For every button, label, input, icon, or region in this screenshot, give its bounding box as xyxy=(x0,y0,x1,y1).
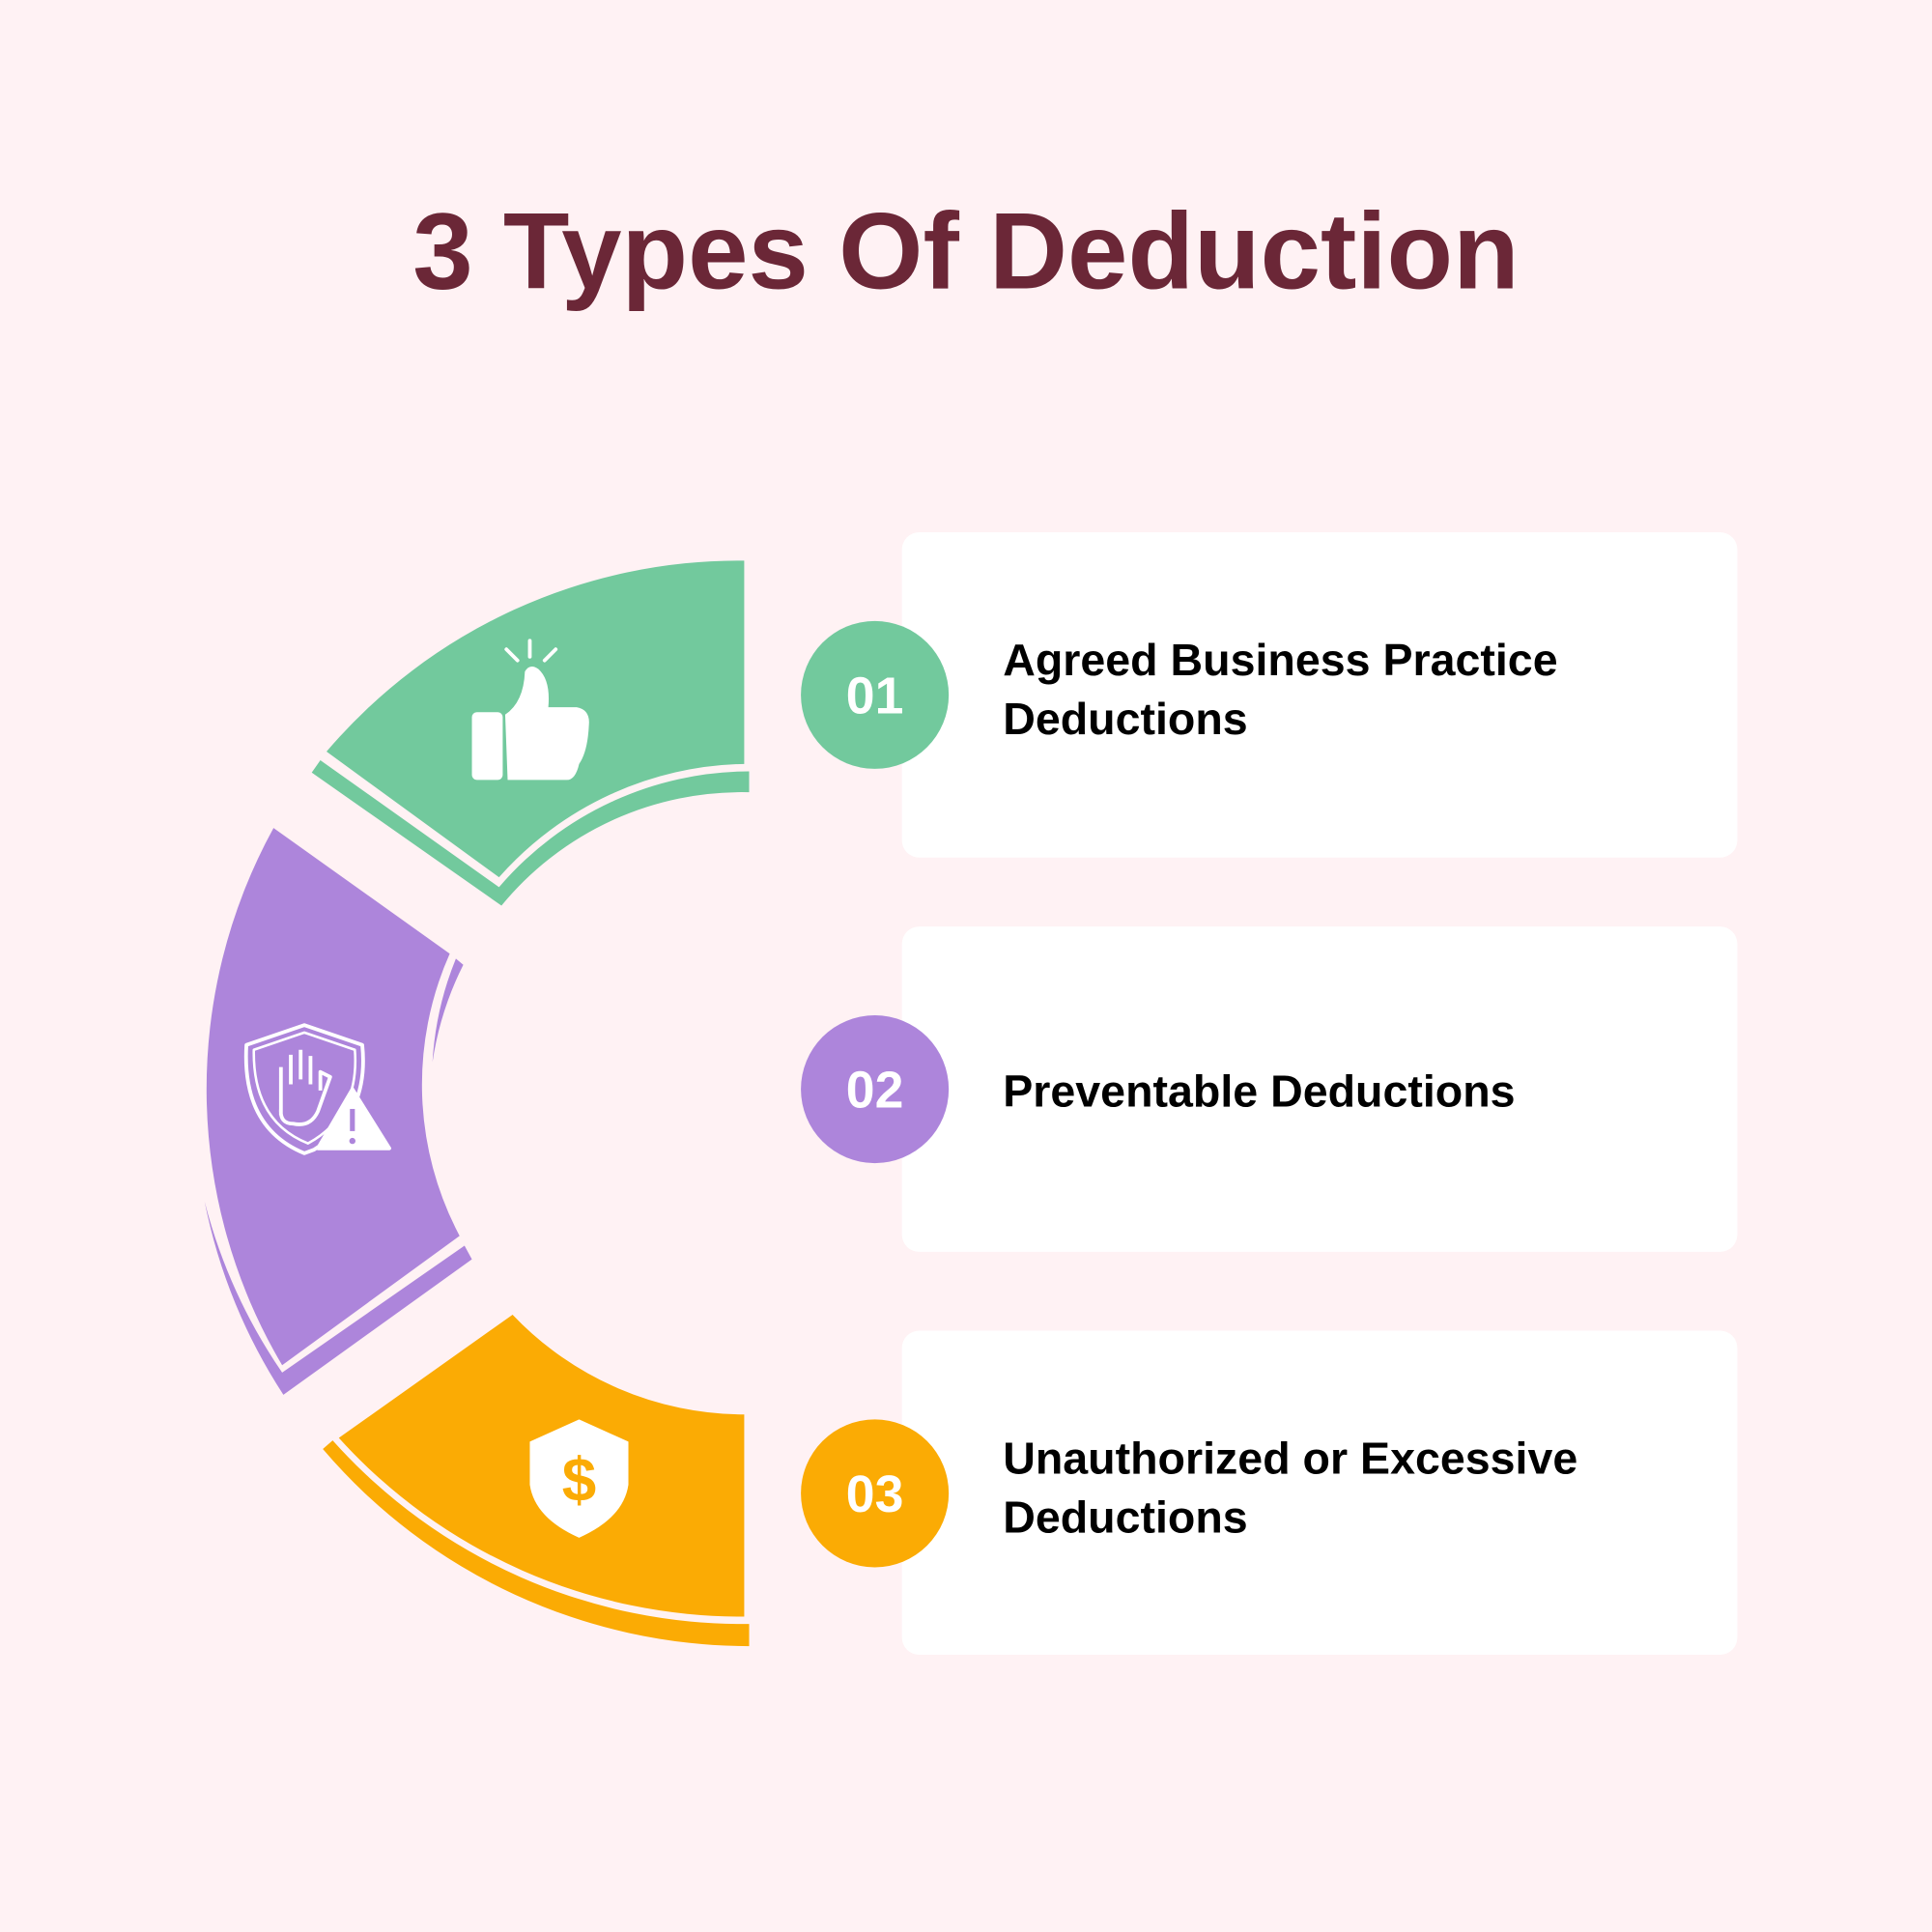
number badge 01 xyxy=(801,621,949,769)
card 3 text: Unauthorized or Excessive xyxy=(1003,1434,1577,1484)
icon: shield with dollar xyxy=(529,1419,629,1538)
card 2 text: Preventable Deductions xyxy=(1003,1065,1516,1116)
number badge 01: 01 xyxy=(846,668,903,725)
card 3 text: Deductions xyxy=(1003,1492,1248,1543)
number badge 03 xyxy=(801,1419,949,1567)
number badge 02 xyxy=(801,1015,949,1163)
card 1 text: Agreed Business Practice xyxy=(1003,635,1558,685)
icon: shield with dollar: $ xyxy=(562,1445,596,1515)
ring segment: green xyxy=(312,560,750,906)
card 2 xyxy=(801,926,1737,1252)
ring segment: purple xyxy=(205,828,472,1395)
number badge 03: 03 xyxy=(846,1466,903,1523)
icon: thumbs up xyxy=(472,640,589,780)
ring segment: orange xyxy=(323,1315,750,1646)
number badge 02: 02 xyxy=(846,1063,903,1120)
title: 3 Types Of Deduction xyxy=(412,189,1520,311)
card 3 xyxy=(801,1331,1737,1655)
card 1 text: Deductions xyxy=(1003,694,1248,744)
card 1 xyxy=(801,532,1737,858)
icon: hand on shield with warning xyxy=(246,1025,389,1153)
